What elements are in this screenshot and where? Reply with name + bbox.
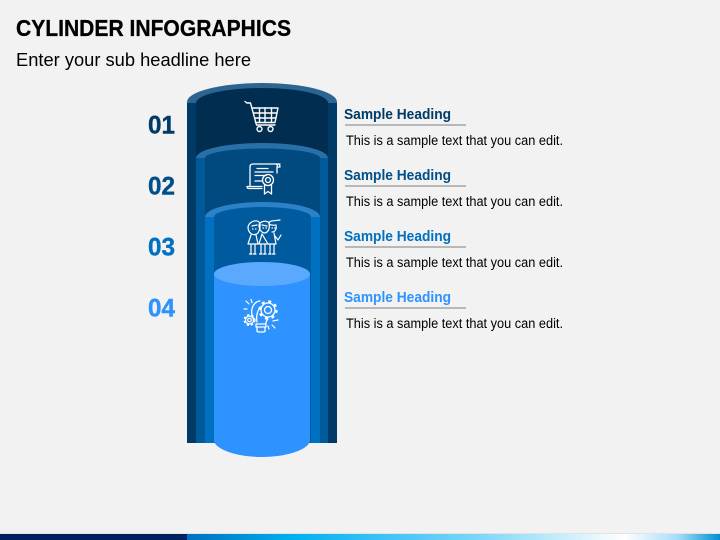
cylinder stack	[187, 83, 337, 457]
body text 4: This is a sample text that you can edit.	[346, 316, 563, 331]
body text 3: This is a sample text that you can edit.	[346, 255, 563, 270]
cylinder 1 outer	[187, 83, 337, 443]
number 03: 03	[148, 234, 175, 262]
row 03	[148, 228, 563, 270]
cylinder 4 front	[214, 262, 310, 457]
icon: group of people	[248, 220, 281, 254]
heading 1: Sample Heading	[344, 106, 451, 123]
icon: lightbulb with gears	[244, 300, 278, 332]
cylinder 2	[196, 143, 328, 443]
number 04: 04	[148, 294, 175, 322]
number 02: 02	[148, 172, 175, 200]
subtitle: Enter your sub headline here	[16, 50, 251, 70]
row 01	[148, 106, 563, 148]
number 01: 01	[148, 112, 175, 140]
footer bar	[0, 533, 720, 540]
row 02	[148, 167, 563, 209]
body text 2: This is a sample text that you can edit.	[346, 194, 563, 209]
body text 1: This is a sample text that you can edit.	[346, 133, 563, 148]
heading 4: Sample Heading	[344, 289, 451, 306]
title: CYLINDER INFOGRAPHICS	[16, 15, 291, 41]
heading 2: Sample Heading	[344, 167, 451, 184]
row 04	[148, 289, 563, 331]
icon: shopping cart	[245, 102, 278, 132]
icon: certificate	[247, 164, 280, 194]
heading 3: Sample Heading	[344, 228, 451, 245]
cylinder 3	[205, 202, 320, 443]
